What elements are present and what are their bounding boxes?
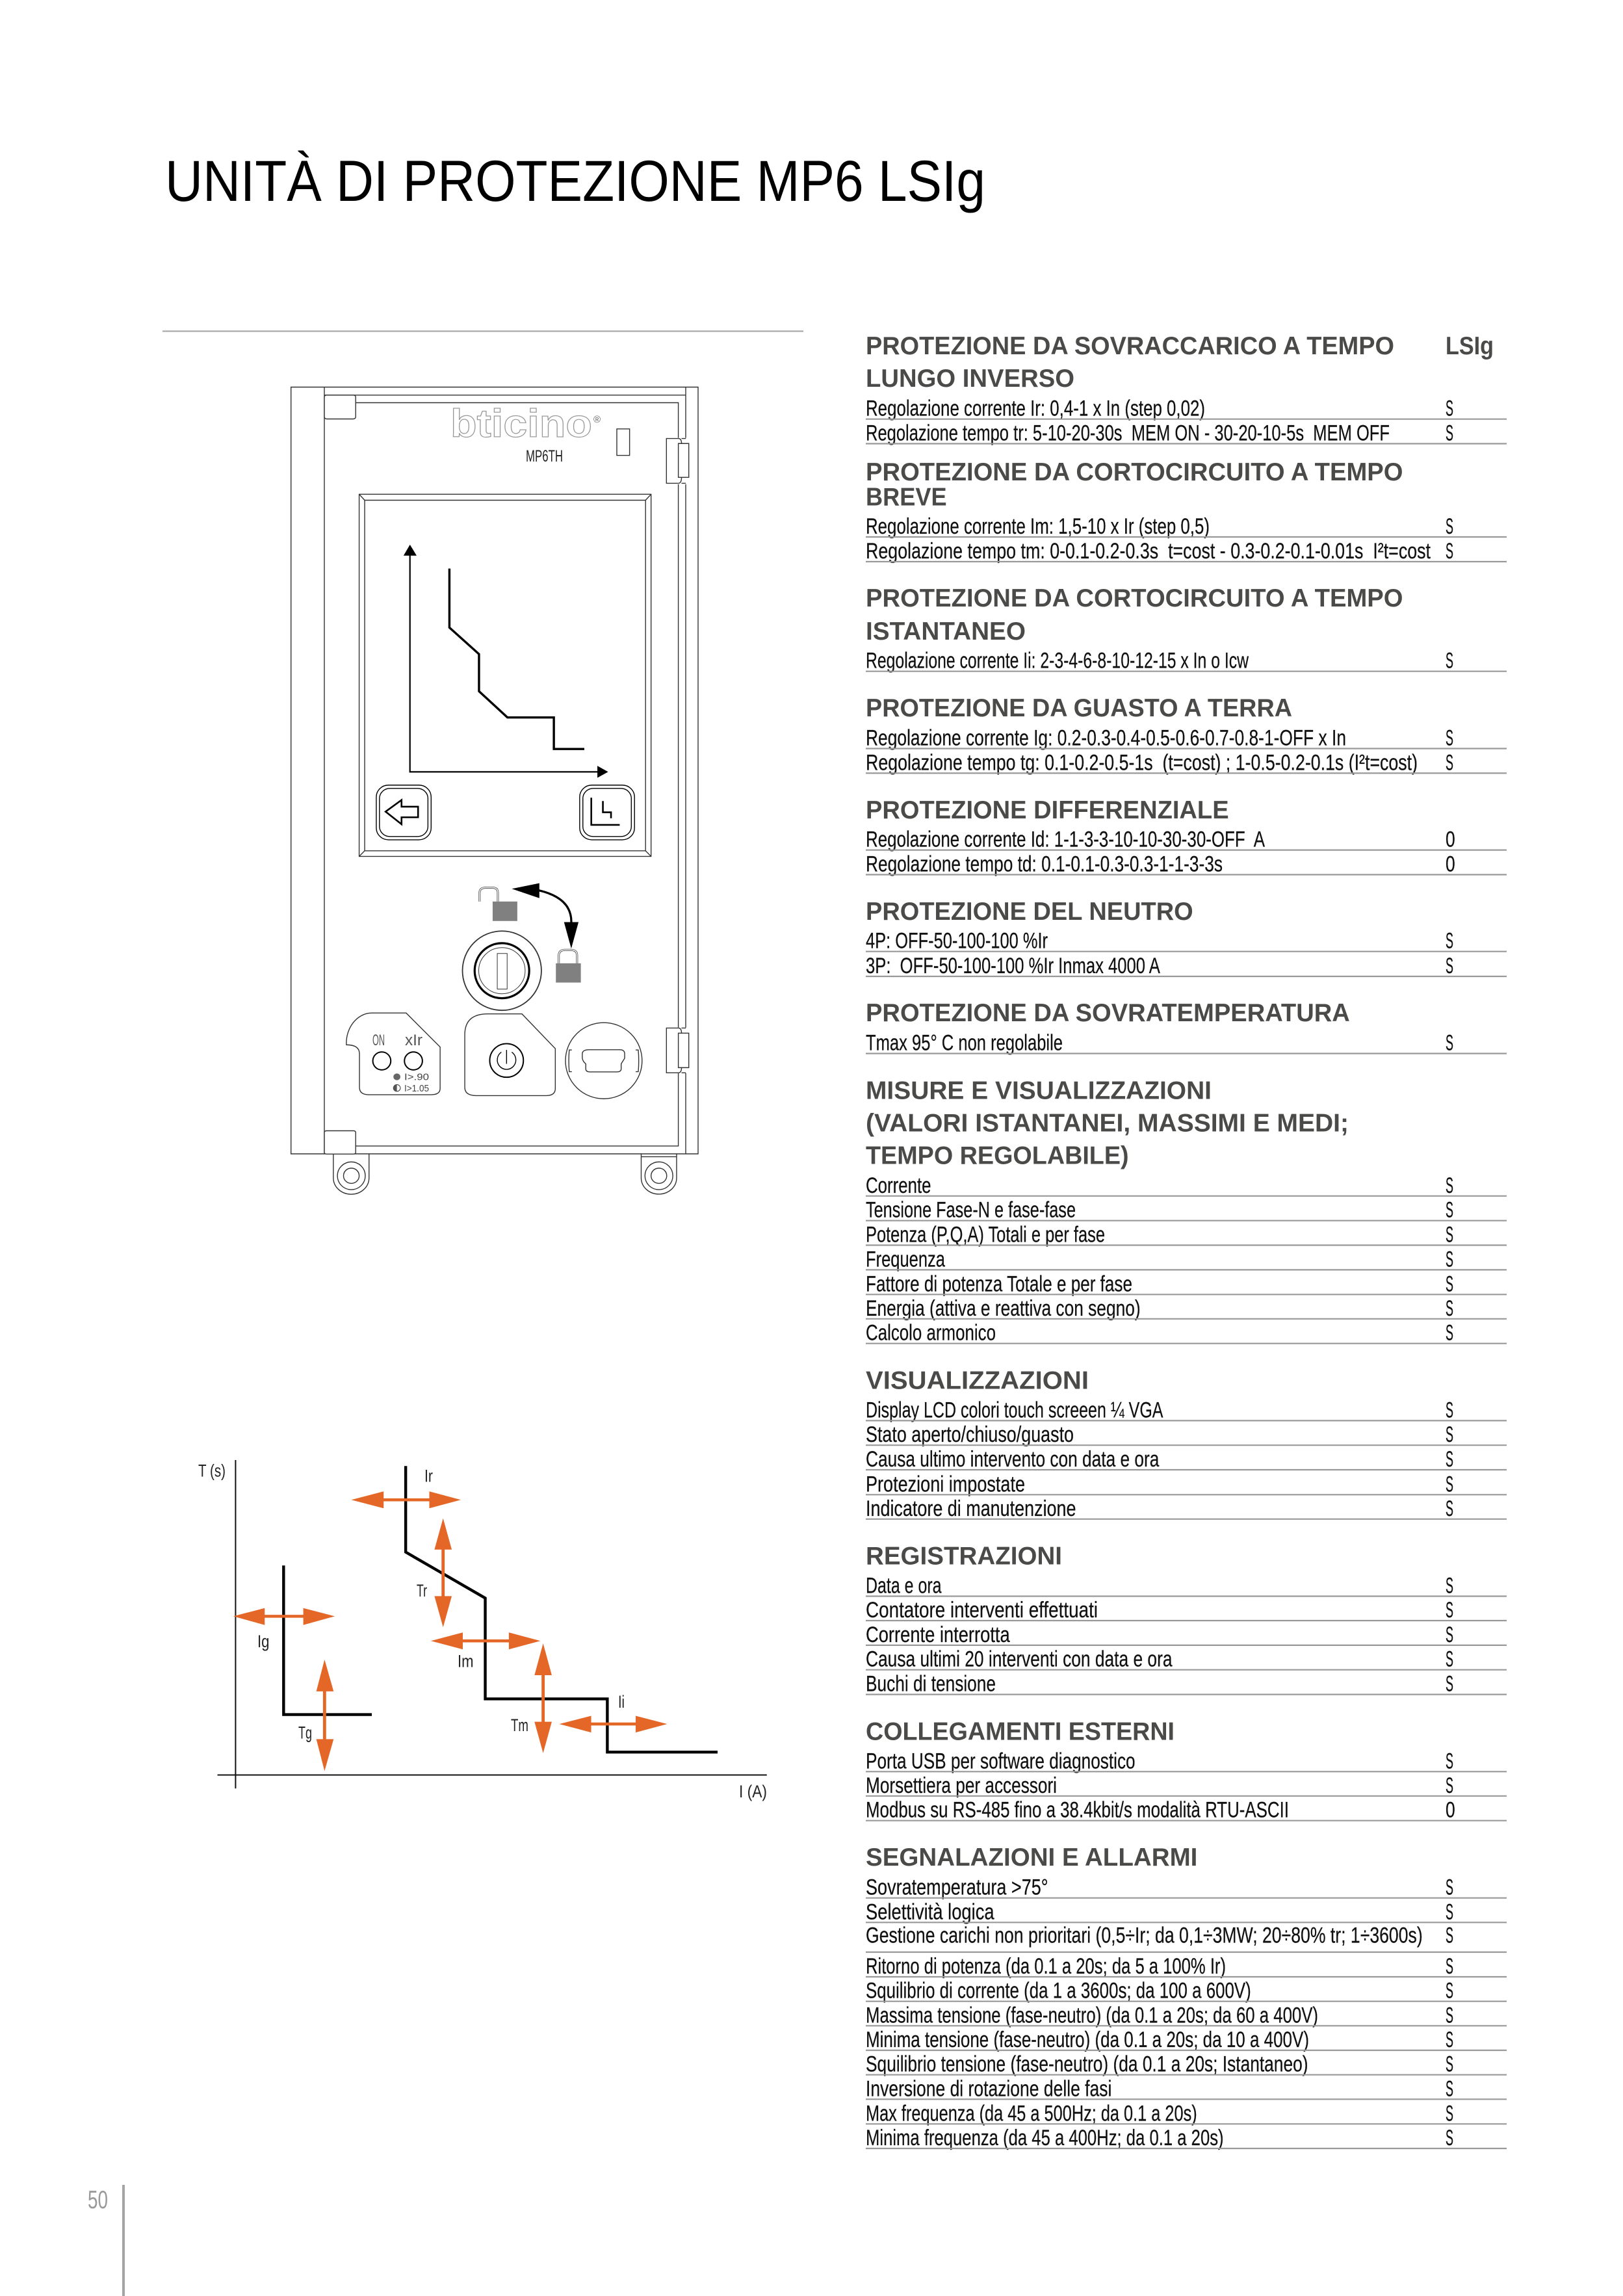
page number: 50 xyxy=(88,2186,108,2214)
row: S xyxy=(1446,1899,1453,1924)
brand logo: bticino xyxy=(450,402,592,445)
row: S xyxy=(1446,1573,1453,1598)
row: Minima frequenza (da 45 a 400Hz; da 0.1 a 20s) xyxy=(866,2126,1224,2150)
row: Causa ultimo intervento con data e ora xyxy=(866,1447,1159,1472)
row: Ritorno di potenza (da 0.1 a 20s; da 5 a 100% Ir) xyxy=(866,1954,1226,1979)
row: S xyxy=(1446,1398,1453,1422)
heading: COLLEGAMENTI ESTERNI xyxy=(866,1717,1175,1745)
row xyxy=(866,1647,1507,1672)
row: Regolazione corrente Ii: 2-3-4-6-8-10-12-15 x In o Icw xyxy=(866,649,1249,673)
heading: PROTEZIONE DA CORTOCIRCUITO A TEMPO xyxy=(866,458,1403,486)
panel: cortocircuito breve xyxy=(866,458,1507,564)
panel: segnalazioni e allarmi xyxy=(866,1844,1507,2150)
heading line 2: LUNGO INVERSO xyxy=(866,365,1074,393)
panel: sovraccarico xyxy=(866,332,1507,446)
row: Max frequenza (da 45 a 500Hz; da 0.1 a 20s) xyxy=(866,2101,1197,2126)
row: Regolazione tempo tm: 0-0.1-0.2-0.3s t=cost - 0.3-0.2-0.1-0.01s I²t=cost xyxy=(866,539,1431,564)
lower panel with lock, LEDs, power button and USB port xyxy=(324,883,689,1194)
row: S xyxy=(1446,1222,1453,1247)
row xyxy=(866,397,1507,421)
model label: MP6TH xyxy=(526,447,563,465)
row: S xyxy=(1446,1954,1453,1979)
row xyxy=(866,1198,1507,1223)
row: S xyxy=(1446,1623,1453,1647)
LED legend 1.05: I>1.05 xyxy=(404,1083,429,1094)
row: S xyxy=(1446,649,1453,673)
heading line 2: (VALORI ISTANTANEI, MASSIMI E MEDI; xyxy=(866,1110,1349,1138)
row: Potenza (P,Q,A) Totali e per fase xyxy=(866,1222,1105,1247)
label Ir: Ir xyxy=(424,1466,433,1485)
heading: PROTEZIONE DEL NEUTRO xyxy=(866,898,1193,926)
heading: PROTEZIONE DA CORTOCIRCUITO A TEMPO xyxy=(866,584,1403,612)
row: S xyxy=(1446,1031,1453,1056)
panel: sovratemperatura xyxy=(866,999,1507,1056)
row: Morsettiera per accessori xyxy=(866,1773,1057,1798)
row: S xyxy=(1446,397,1453,421)
row: S xyxy=(1446,1979,1453,2003)
row: S xyxy=(1446,1647,1453,1672)
row: Fattore di potenza Totale e per fase xyxy=(866,1272,1132,1296)
row: S xyxy=(1446,2101,1453,2126)
row: S xyxy=(1446,1749,1453,1773)
row: S xyxy=(1446,1321,1453,1346)
row xyxy=(866,1222,1507,1247)
row: Squilibrio tensione (fase-neutro) (da 0.1 a 20s; Istantaneo) xyxy=(866,2052,1308,2077)
row: S xyxy=(1446,1598,1453,1623)
row xyxy=(866,1623,1507,1647)
row: Calcolo armonico xyxy=(866,1321,996,1346)
label Tr: Tr xyxy=(417,1581,427,1600)
row: Frequenza xyxy=(866,1247,945,1272)
title: UNITÀ DI PROTEZIONE MP6 LSIg xyxy=(165,148,985,213)
row xyxy=(866,1422,1507,1447)
heading: MISURE E VISUALIZZAZIONI xyxy=(866,1076,1212,1105)
row: Stato aperto/chiuso/guasto xyxy=(866,1422,1074,1447)
row xyxy=(866,1496,1507,1521)
row: Buchi di tensione xyxy=(866,1672,996,1697)
row xyxy=(866,929,1507,954)
panel: misure e visualizzazioni xyxy=(866,1076,1507,1346)
row: Selettività logica xyxy=(866,1899,994,1924)
row: S xyxy=(1446,1198,1453,1223)
row xyxy=(866,1272,1507,1296)
row xyxy=(866,1773,1507,1798)
row xyxy=(866,2076,1507,2101)
heading: PROTEZIONE DA GUASTO A TERRA xyxy=(866,694,1292,722)
heading line 2: BREVE xyxy=(866,484,947,511)
row: Regolazione tempo tg: 0.1-0.2-0.5-1s (t=cost) ; 1-0.5-0.2-0.1s (I²t=cost) xyxy=(866,750,1418,775)
axis label T (s): T (s) xyxy=(198,1461,226,1481)
row: S xyxy=(1446,2028,1453,2052)
row xyxy=(866,954,1507,978)
row: Corrente interrotta xyxy=(866,1623,1010,1647)
row: S xyxy=(1446,1773,1453,1798)
registered mark: ® xyxy=(593,414,601,425)
column header LSIg: LSIg xyxy=(1446,332,1494,360)
row: Regolazione tempo tr: 5-10-20-30s MEM ON - 30-20-10-5s MEM OFF xyxy=(866,421,1390,446)
row: S xyxy=(1446,1923,1453,1948)
row: S xyxy=(1446,1875,1453,1900)
row: Energia (attiva e reattiva con segno) xyxy=(866,1296,1141,1321)
label Ii: Ii xyxy=(618,1692,625,1712)
panel: collegamenti esterni xyxy=(866,1717,1507,1823)
row: S xyxy=(1446,2003,1453,2028)
row: Protezioni impostate xyxy=(866,1472,1025,1496)
row: Data e ora xyxy=(866,1573,942,1598)
panel: registrazioni xyxy=(866,1542,1507,1697)
heading line 3: TEMPO REGOLABILE) xyxy=(866,1141,1129,1169)
row: S xyxy=(1446,1496,1453,1521)
row: Regolazione corrente Im: 1,5-10 x Ir (step 0,5) xyxy=(866,514,1210,539)
row: S xyxy=(1446,929,1453,954)
label Ig: Ig xyxy=(257,1632,269,1651)
row: S xyxy=(1446,2052,1453,2077)
row: Sovratemperatura >75° xyxy=(866,1875,1048,1900)
row xyxy=(866,1031,1507,1056)
heading: PROTEZIONE DIFFERENZIALE xyxy=(866,796,1229,824)
heading: VISUALIZZAZIONI xyxy=(866,1366,1089,1394)
row: S xyxy=(1446,954,1453,978)
axis label I (A): I (A) xyxy=(739,1782,767,1801)
row xyxy=(866,1875,1507,1900)
heading line 2: ISTANTANEO xyxy=(866,618,1026,646)
row: 0 xyxy=(1446,1798,1455,1823)
panel: differenziale xyxy=(866,796,1507,876)
row: S xyxy=(1446,1247,1453,1272)
row: Regolazione corrente Id: 1-1-3-3-10-10-30-30-OFF A xyxy=(866,828,1265,852)
row xyxy=(866,1247,1507,1272)
row: S xyxy=(1446,1173,1453,1198)
panel: guasto a terra xyxy=(866,694,1507,775)
illustration: MP6TH protection unit front panel xyxy=(291,387,698,1194)
row: S xyxy=(1446,539,1453,564)
LED label ON: ON xyxy=(372,1032,385,1049)
panel: visualizzazioni xyxy=(866,1366,1507,1521)
label Tm: Tm xyxy=(511,1715,528,1735)
row xyxy=(866,1321,1507,1346)
row: Tmax 95° C non regolabile xyxy=(866,1031,1063,1056)
row xyxy=(866,1296,1507,1321)
row xyxy=(866,1899,1507,1924)
row: Regolazione corrente Ig: 0.2-0.3-0.4-0.5-0.6-0.7-0.8-1-OFF x In xyxy=(866,725,1346,750)
row: Display LCD colori touch screeen ¼ VGA xyxy=(866,1398,1163,1422)
axes, curves and adjustment arrows xyxy=(218,1460,767,1788)
row xyxy=(866,2101,1507,2126)
row: S xyxy=(1446,514,1453,539)
heading: PROTEZIONE DA SOVRACCARICO A TEMPO xyxy=(866,332,1394,360)
row: S xyxy=(1446,1296,1453,1321)
row: S xyxy=(1446,421,1453,446)
row: S xyxy=(1446,2076,1453,2101)
row: Corrente xyxy=(866,1173,931,1198)
chart: time-current trip curves xyxy=(198,1460,767,1801)
row: Causa ultimi 20 interventi con data e ora xyxy=(866,1647,1173,1672)
row: Contatore interventi effettuati xyxy=(866,1598,1098,1623)
row: Regolazione corrente Ir: 0,4-1 x In (step 0,02) xyxy=(866,397,1205,421)
row: Massima tensione (fase-neutro) (da 0.1 a 20s; da 60 a 400V) xyxy=(866,2003,1318,2028)
row: Tensione Fase-N e fase-fase xyxy=(866,1198,1076,1223)
row: Squilibrio di corrente (da 1 a 3600s; da 100 a 600V) xyxy=(866,1979,1251,2003)
row: Modbus su RS-485 fino a 38.4kbit/s modalità RTU-ASCII xyxy=(866,1798,1289,1823)
LED label xIr: xIr xyxy=(405,1032,422,1049)
row: S xyxy=(1446,1422,1453,1447)
row xyxy=(866,1173,1507,1198)
row: Gestione carichi non prioritari (0,5÷Ir; da 0,1÷3MW; 20÷80% tr; 1÷3600s) xyxy=(866,1923,1423,1948)
row: S xyxy=(1446,1272,1453,1296)
screen bezel and upper panel xyxy=(324,395,689,856)
LED legend 0.90: I>.90 xyxy=(404,1072,429,1083)
panel: neutro xyxy=(866,898,1507,978)
row: S xyxy=(1446,750,1453,775)
row: 4P: OFF-50-100-100 %Ir xyxy=(866,929,1048,954)
row: Minima tensione (fase-neutro) (da 0.1 a 20s; da 10 a 400V) xyxy=(866,2028,1309,2052)
row: Porta USB per software diagnostico xyxy=(866,1749,1136,1773)
row xyxy=(866,1672,1507,1697)
row: S xyxy=(1446,2126,1453,2150)
heading: PROTEZIONE DA SOVRATEMPERATURA xyxy=(866,999,1350,1027)
row: 0 xyxy=(1446,828,1455,852)
row: S xyxy=(1446,1672,1453,1697)
row: S xyxy=(1446,1447,1453,1472)
label Tg: Tg xyxy=(298,1723,312,1742)
row: Indicatore di manutenzione xyxy=(866,1496,1076,1521)
row xyxy=(866,1472,1507,1496)
row: Regolazione tempo td: 0.1-0.1-0.3-0.3-1-1-3-3s xyxy=(866,852,1223,876)
row xyxy=(866,1598,1507,1623)
label Im: Im xyxy=(458,1651,473,1671)
row xyxy=(866,1398,1507,1422)
row xyxy=(866,1749,1507,1773)
row xyxy=(866,1573,1507,1598)
row: Inversione di rotazione delle fasi xyxy=(866,2076,1111,2101)
row: 0 xyxy=(1446,852,1455,876)
heading: REGISTRAZIONI xyxy=(866,1542,1062,1571)
row: S xyxy=(1446,1472,1453,1496)
row: S xyxy=(1446,725,1453,750)
panel: cortocircuito istantaneo xyxy=(866,584,1507,673)
heading: SEGNALAZIONI E ALLARMI xyxy=(866,1844,1197,1872)
row: 3P: OFF-50-100-100 %Ir Inmax 4000 A xyxy=(866,954,1160,978)
row xyxy=(866,1447,1507,1472)
